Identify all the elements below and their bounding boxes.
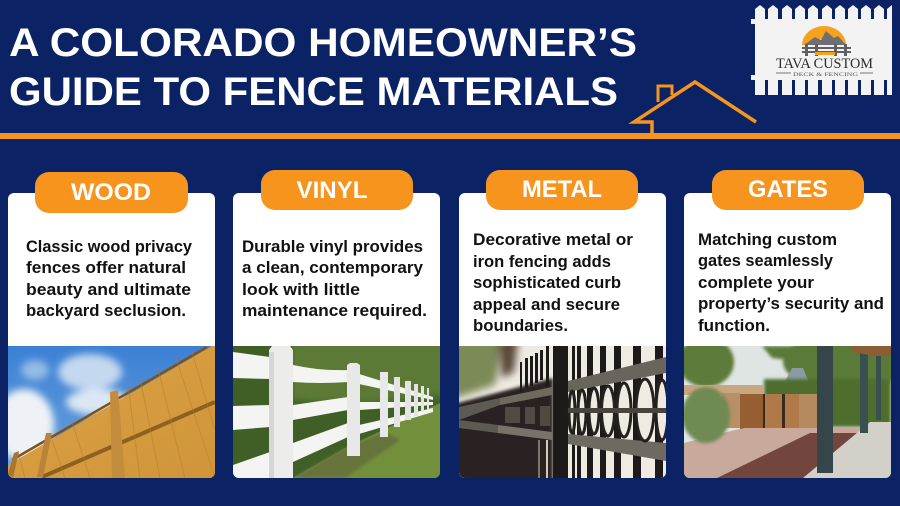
vinyl card background <box>233 193 440 478</box>
metal card background <box>459 193 666 478</box>
metal description: sophisticated curb <box>473 274 621 292</box>
wood heading pill: WOOD <box>71 179 151 206</box>
title: GUIDE TO FENCE MATERIALS <box>9 70 618 114</box>
metal description: appeal and secure <box>473 296 620 314</box>
gates description: gates seamlessly <box>698 252 834 270</box>
orange divider with house roof icon <box>0 82 900 139</box>
vinyl description: look with little <box>242 281 360 299</box>
panel: vinyl <box>233 170 450 478</box>
logo: white picket fence with Tava Custom wordmark: TAVA CUSTOM <box>776 56 873 72</box>
vinyl heading pill: VINYL <box>296 177 368 204</box>
photo: wood gate and brick driveway <box>684 346 891 478</box>
metal description <box>473 231 634 335</box>
panel: gates <box>678 170 900 478</box>
vinyl description: Durable vinyl provides <box>242 238 423 256</box>
metal description: boundaries. <box>473 317 568 335</box>
vinyl description <box>242 238 427 320</box>
wood description <box>26 238 193 320</box>
metal heading pill: METAL <box>522 176 602 203</box>
photo: black decorative iron fence <box>459 346 666 478</box>
vinyl description: maintenance required. <box>242 302 427 320</box>
wood description: Classic wood privacy <box>26 238 193 256</box>
gates card background <box>684 193 891 478</box>
title <box>9 21 637 114</box>
wood description: fences offer natural <box>26 259 186 277</box>
wood card background <box>8 193 215 478</box>
logo: white picket fence with Tava Custom wordmark <box>751 5 892 95</box>
photo: white vinyl rail fence <box>233 340 450 478</box>
panel: metal <box>450 170 668 490</box>
gates heading pill: GATES <box>748 176 828 203</box>
gates description <box>698 231 884 335</box>
gates description: Matching custom <box>698 231 837 249</box>
panel: wood <box>0 172 215 478</box>
gates description: function. <box>698 317 770 335</box>
wood description: beauty and ultimate <box>26 281 191 299</box>
gates description: property’s security and <box>698 295 884 313</box>
vinyl description: a clean, contemporary <box>242 259 424 277</box>
metal description: iron fencing adds <box>473 253 611 271</box>
title: A COLORADO HOMEOWNER’S <box>9 21 637 65</box>
logo: white picket fence with Tava Custom wordmark: DECK & FENCING <box>793 72 858 78</box>
gates heading pill <box>712 170 864 210</box>
metal description: Decorative metal or <box>473 231 634 249</box>
wood heading pill <box>35 172 188 213</box>
photo: wood privacy fence against sky <box>0 346 215 478</box>
gates description: complete your <box>698 274 815 292</box>
wood description: backyard seclusion. <box>26 302 186 320</box>
metal heading pill <box>486 170 638 210</box>
vinyl heading pill <box>261 170 413 210</box>
